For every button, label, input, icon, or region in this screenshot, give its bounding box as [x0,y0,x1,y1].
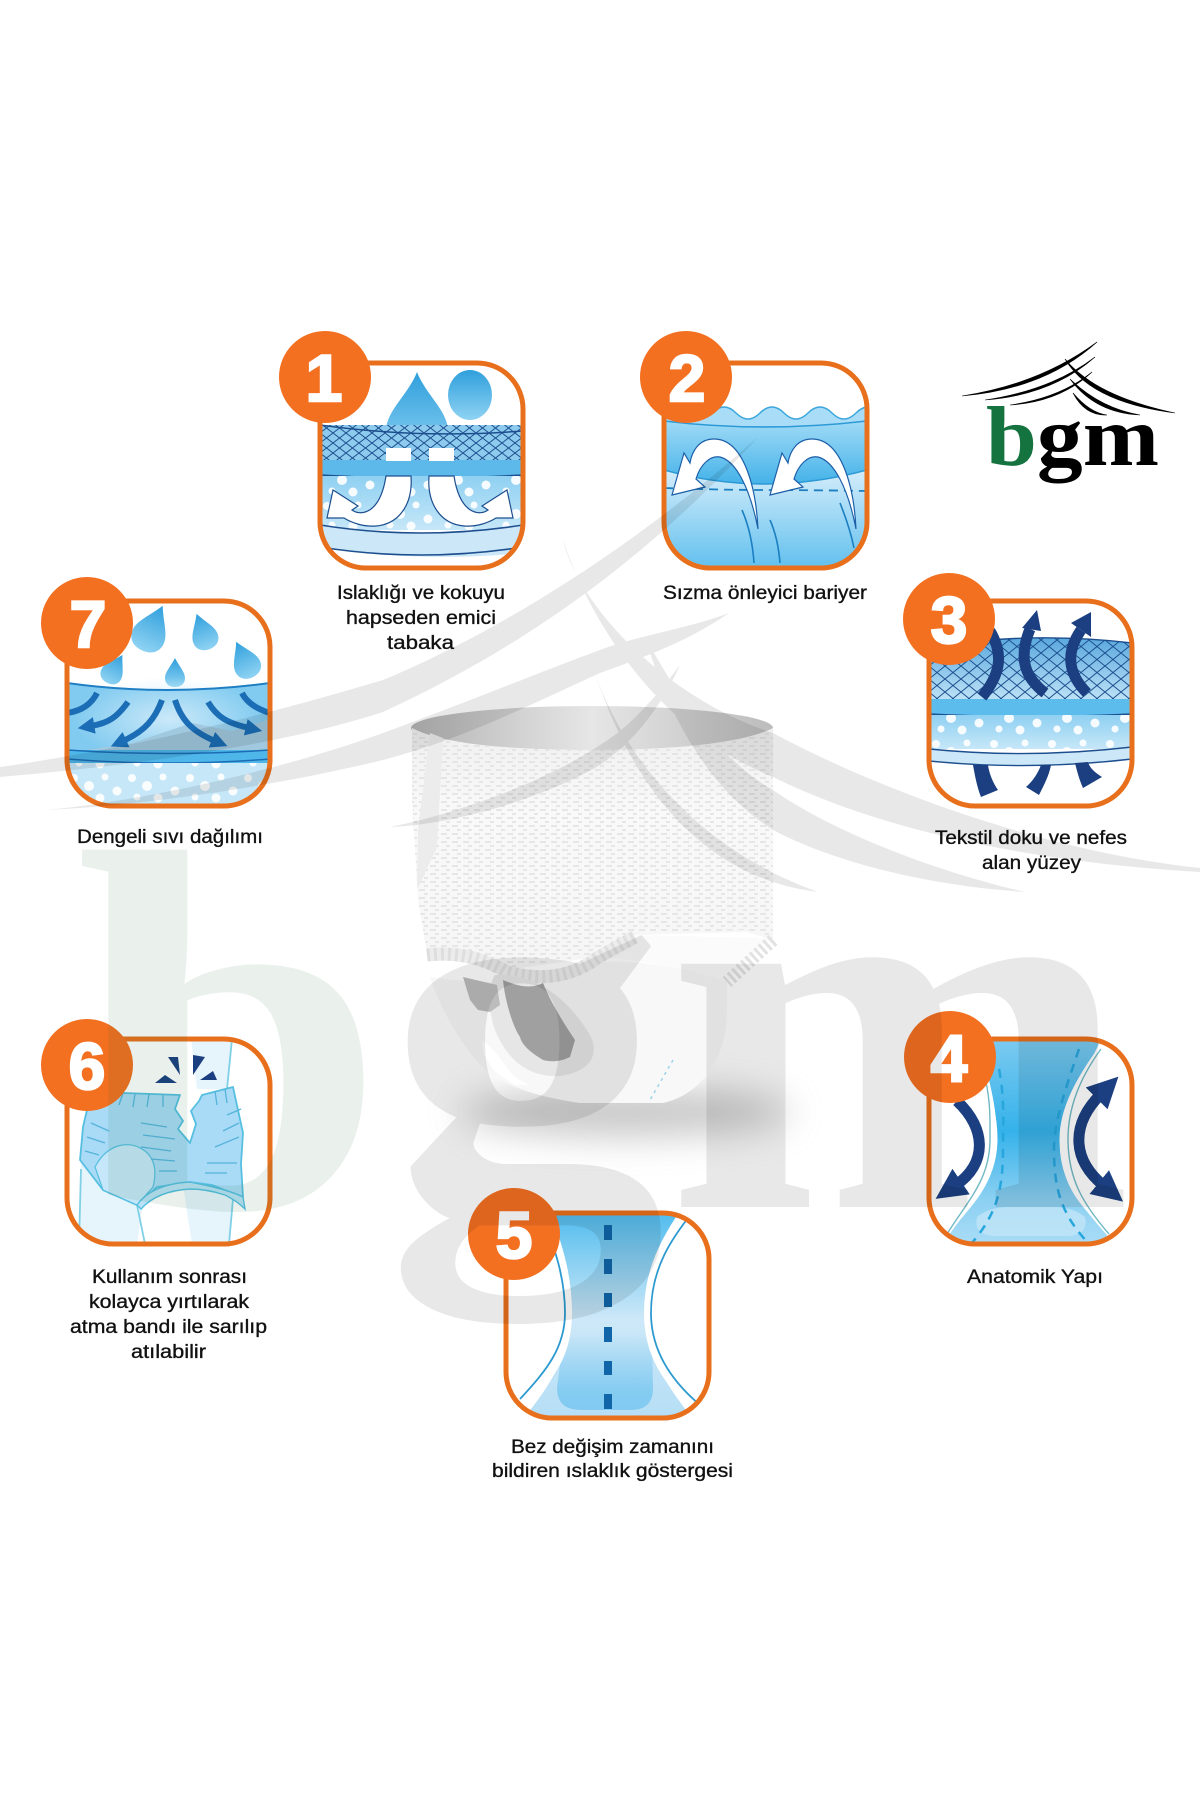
badge 5: 5 [496,1198,532,1272]
panel 5: wetness indicator [468,1188,709,1418]
white arrow left [327,476,411,526]
panel 1 artwork [322,370,520,557]
caption 6: kolayca yırtılarak [89,1291,249,1313]
panel 6 frame [67,1039,270,1244]
diaper lower pad [430,962,727,1103]
drops [386,372,448,425]
logo roof swooshes [962,342,1175,415]
tear sparks [155,1055,217,1083]
white arrow right [770,439,856,529]
flex arrow right [1079,1094,1104,1186]
badge 3 [903,573,995,665]
lower arrows [973,762,1102,797]
badge 6: 6 [69,1029,105,1103]
leg elastic frill ruffles [427,937,635,977]
torn pants [80,1087,243,1205]
leg hole opening [503,980,575,1061]
panel 4 frame [929,1039,1132,1244]
white arrow left [672,439,758,529]
badge 1 [279,331,371,423]
watermark letters gm: gm [386,735,1133,1331]
product: pull-up diaper [411,706,790,1136]
caption 1 [337,582,505,654]
diaper knit texture [412,730,773,968]
badge 7: 7 [70,587,106,661]
panel 1: absorbent layer [279,331,523,568]
panel 6: tear-away disposal [41,1019,270,1244]
panel 7 artwork [67,599,270,806]
caption 3: alan yüzey [982,852,1081,874]
soft pad bottom [976,1207,1086,1236]
distribution arrows [67,693,270,741]
caption 1: Islaklığı ve kokuyu [337,582,505,604]
diaper inner waist opening [411,706,773,750]
panel 7: balanced distribution [41,577,270,806]
panel 4 artwork [929,1039,1132,1244]
panel 4: anatomic shape [904,1011,1132,1244]
panel 2: leak barrier [640,331,880,568]
badge 2: 2 [669,341,705,415]
indicator dashes [604,1225,612,1409]
caption 2: Sızma önleyici bariyer [663,582,868,604]
leg outlines [79,1039,233,1244]
leg hole frill [490,975,594,1076]
blue stitch line [650,1060,673,1100]
logo wordmark: bgm [986,390,1159,484]
panel 2 artwork [666,406,864,566]
panel 3: breathable surface [903,573,1132,806]
badge 6 [41,1019,133,1111]
diaper shadow [460,1088,790,1136]
diaper side seam [417,733,443,890]
caption 3 [935,827,1127,874]
caption 5: bildiren ıslaklık göstergesi [492,1460,733,1482]
badge 2 [640,331,732,423]
flex arrow left [956,1101,979,1185]
far leg frill [727,940,773,982]
lower frill [482,1040,530,1085]
leg elastic frill front [427,937,635,977]
badge 3: 3 [931,583,967,657]
pants ribs [85,1089,241,1173]
caption 1: tabaka [387,632,454,654]
inner fold shading [463,977,500,1012]
panel 5 frame [506,1213,709,1418]
caption 1: hapseden emici [346,607,496,629]
puffed back panel [612,935,770,982]
panel 3 frame [929,601,1132,806]
caption 6 [70,1266,267,1363]
caption 4: Anatomik Yapı [967,1266,1103,1288]
panel 3 artwork [932,610,1130,797]
watermark letter b: b [75,749,386,1319]
panel 2 frame [664,363,867,568]
up arrows [982,629,1087,697]
caption 5 [492,1436,733,1482]
watermark swooshes [0,437,1200,892]
caption 5: Bez değişim zamanını [511,1436,714,1458]
leg frills [137,1182,245,1209]
watermark logo [0,437,1200,1331]
pants leg fold [95,1145,155,1205]
stitched lines [971,1049,1089,1244]
caption 6: Kullanım sonrası [92,1266,247,1288]
panel 6 artwork [78,1042,246,1242]
caption 3: Tekstil doku ve nefes [935,827,1127,849]
caption 6: atılabilir [131,1341,207,1363]
panel 1 frame [320,363,523,568]
legs [79,1039,233,1244]
panel 7 frame [67,601,270,806]
drops [100,606,262,687]
badge 1: 1 [306,341,342,415]
logo [962,342,1175,484]
panel 5 artwork [519,1216,696,1416]
badge 7 [41,577,133,669]
badge 4 [904,1011,996,1103]
hourglass edge lines [554,1218,679,1382]
caption 6: atma bandı ile sarılıp [70,1316,267,1338]
badge 4: 4 [931,1021,968,1095]
badge 5 [468,1188,560,1280]
edge lines [961,1052,1095,1218]
caption 7: Dengeli sıvı dağılımı [77,826,263,848]
white arrow right [429,476,513,526]
diaper waist body [412,728,773,970]
